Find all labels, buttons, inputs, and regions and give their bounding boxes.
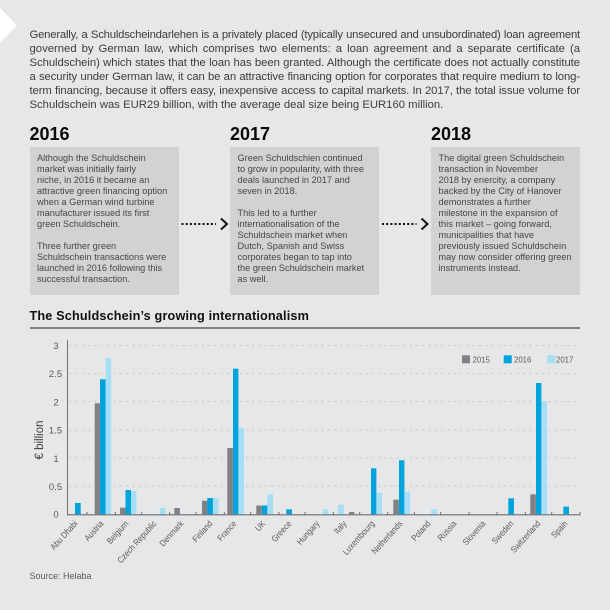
- panel: 2016: green Schuldschein.: [37, 218, 120, 228]
- x axis labels: Luxembourg: [341, 519, 377, 557]
- panel: 2016: attractive green financing option: [37, 186, 167, 196]
- panel: 2016: when a German wind turbine: [37, 196, 154, 206]
- panel: 2016: Although the Schuldschein: [37, 152, 146, 162]
- panel: 2018: previously issued Schuldschein: [438, 240, 566, 250]
- panel: 2016: [30, 147, 178, 295]
- panel: 2016: successful transaction.: [37, 274, 130, 284]
- series 2015 bars: [95, 403, 536, 514]
- x axis labels: UK: [253, 519, 268, 533]
- panel: 2018: transaction in November: [438, 164, 538, 174]
- panel: 2017: as well.: [238, 274, 268, 284]
- intro paragraph: Schuldschein was EUR29 billion, with the average deal size being EUR160 million.: [30, 99, 443, 111]
- panel: 2017: Schuldschein market when: [238, 230, 347, 240]
- chart title: The Schuldschein’s growing internationalism: [30, 309, 309, 323]
- intro paragraph: Generally, a Schuldscheindarlehen is a privately placed (typically unsecured and unsubordinated) loan agreement: [30, 29, 580, 41]
- panel: 2017: corporates began to tap into: [238, 252, 352, 262]
- y axis labels: [49, 341, 62, 520]
- x axis labels: Poland: [410, 519, 433, 543]
- intro paragraph: term financing, because it offers easy, inexpensive access to capital markets. In 2017, the total issue volume for: [30, 85, 580, 97]
- panel: 2018: this market – going forward,: [438, 218, 552, 228]
- legend: 2016: [514, 356, 531, 364]
- intro paragraph: governed by German law, which comprises two elements: a loan agreement and a separate certificate (a: [30, 43, 580, 55]
- x axis labels: Russia: [436, 519, 459, 543]
- series 2016 bars: [75, 369, 569, 514]
- panel: 2018: [431, 147, 580, 295]
- x axis labels: Switzerland: [509, 519, 543, 555]
- arrow: 2017 to 2018: [382, 218, 429, 230]
- bar chart: [34, 340, 580, 565]
- source note: Source: Helaba: [30, 571, 92, 581]
- intro paragraph: [30, 29, 580, 111]
- y axis labels: 0: [53, 510, 59, 520]
- x axis labels: Czech Republic: [116, 519, 159, 565]
- x axis labels: Belgium: [105, 519, 131, 546]
- series 2017 bars: [106, 358, 547, 514]
- heading: 2017: 2017: [230, 124, 270, 144]
- y axis title: € billion: [34, 420, 46, 460]
- intro paragraph: Schuldschein) which states that the loan has been granted. Although the certificate does not actually constitute: [30, 57, 580, 69]
- x axis labels: Sweden: [490, 519, 516, 546]
- legend: 2015: [472, 356, 491, 364]
- x axis labels: Abu Dhabi: [49, 519, 80, 552]
- intro paragraph: a security under German law, it can be an attractive financing option for corporates that require medium to long-: [30, 71, 580, 83]
- x axis labels: Slovenia: [461, 519, 488, 547]
- y axis labels: 1.5: [49, 426, 62, 436]
- panel: 2017: to grow in popularity, with three: [238, 164, 364, 174]
- panel: 2016: launched in 2016 following this: [37, 262, 162, 272]
- panel: 2016: Three further green: [37, 240, 116, 250]
- x axis labels: Hungary: [295, 518, 322, 547]
- y axis labels: 1: [53, 454, 59, 465]
- panel: 2017: the green Schuldschein market: [238, 262, 364, 272]
- y axis labels: 2: [53, 398, 59, 408]
- panel: 2016: manufacturer issued its first: [37, 208, 149, 218]
- arrow: 2016 to 2017: [182, 218, 228, 230]
- panel: 2016: market was initially fairly: [37, 164, 136, 174]
- panel: 2018: 2018 by enercity, a company: [438, 174, 555, 184]
- panel: 2016: niche, in 2016 it became an: [37, 174, 149, 184]
- panel: 2018: instruments instead.: [438, 262, 521, 272]
- x axis labels: Italy: [332, 518, 349, 536]
- x axis labels: Austria: [83, 519, 106, 543]
- x axis labels: Greece: [270, 519, 294, 544]
- panel: 2016: Schuldschein transactions were: [37, 252, 166, 262]
- x axis labels: Finland: [191, 519, 215, 544]
- x axis labels: Spain: [549, 519, 570, 540]
- x axis labels: Denmark: [158, 518, 186, 548]
- panel: 2018: demonstrates a further: [438, 196, 531, 206]
- x axis labels: France: [216, 519, 239, 543]
- panel: 2017: internationalisation of the: [238, 218, 340, 228]
- panel: 2017: Dutch, Spanish and Swiss: [238, 240, 344, 250]
- x axis labels: [49, 518, 570, 565]
- y axis labels: 0.5: [49, 482, 62, 493]
- panel: 2017: [230, 147, 379, 295]
- y axis labels: 2.5: [49, 369, 62, 380]
- axes: [67, 340, 580, 515]
- panel: 2018: may now consider offering green: [438, 252, 572, 262]
- panel: 2018: backed by the City of Hanover: [438, 186, 562, 196]
- legend: 2017: [556, 356, 573, 364]
- heading: 2016: 2016: [30, 124, 70, 144]
- panel: 2018: milestone in the expansion of: [438, 208, 558, 218]
- panel: 2017: deals launched in 2017 and: [238, 174, 350, 184]
- icon: white corner triangle: [0, 8, 17, 43]
- panel: 2017: Green Schuldschien continued: [238, 152, 363, 162]
- panel: 2018: municipalities that have: [438, 230, 534, 240]
- legend: [462, 355, 573, 364]
- x axis labels: Netherlands: [370, 519, 405, 556]
- panel: 2017: This led to a further: [238, 208, 317, 218]
- panel: 2017: seven in 2018.: [238, 186, 297, 196]
- heading: 2018: 2018: [431, 124, 471, 144]
- y axis labels: 3: [53, 341, 59, 352]
- panel: 2018: The digital green Schuldschein: [438, 152, 564, 162]
